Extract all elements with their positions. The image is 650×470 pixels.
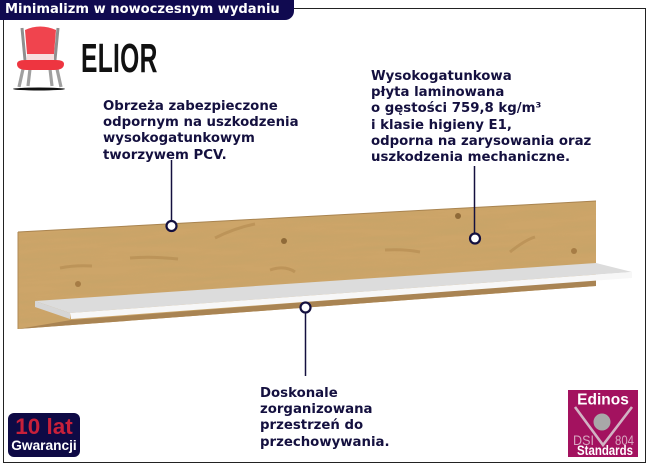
header banner: Minimalizm w nowoczesnym wydaniu (5, 2, 280, 17)
text: storage space: przechowywania. (260, 435, 390, 450)
text: laminated board: i klasie higieny E1, (371, 118, 512, 133)
callout: storage (300, 302, 310, 376)
callout: board (470, 166, 480, 244)
badge: Edinos standards: 804 (615, 432, 634, 448)
text: storage space (260, 386, 390, 450)
badge number: 10 lat (15, 414, 73, 439)
text: laminated board: płyta laminowana (371, 85, 504, 100)
badge: Edinos standards (568, 390, 638, 457)
icon: red chair (13, 26, 65, 90)
product name: ELIOR (81, 35, 158, 81)
text: storage space: przestrzeń do (260, 418, 363, 433)
text: laminated board: Wysokogatunkowa (371, 68, 512, 84)
badge: Edinos standards: Edinos (577, 392, 629, 408)
badge: 10 year warranty (8, 413, 80, 457)
shelf illustration (18, 160, 632, 376)
text: storage space: zorganizowana (260, 402, 373, 417)
text: laminated board: uszkodzenia mechaniczne. (371, 150, 570, 165)
callout: edge (166, 160, 176, 231)
text: edge protection: tworzywem PCV. (103, 148, 227, 163)
oak back panel (18, 200, 596, 329)
text: edge protection: Obrzeża zabezpieczone (103, 98, 278, 114)
text: edge protection (103, 98, 299, 163)
badge caption: Gwarancji (11, 438, 77, 453)
white shelf (35, 263, 632, 319)
text: edge protection: wysokogatunkowym (103, 131, 255, 146)
text: laminated board (371, 68, 591, 165)
text: laminated board: o gęstości 759,8 kg/m³ (371, 101, 541, 116)
text: edge protection: odpornym na uszkodzenia (103, 115, 299, 130)
badge: Edinos standards: DSI (573, 432, 594, 448)
text: laminated board: odporna na zarysowania oraz (371, 134, 591, 149)
text: storage space: Doskonale (260, 386, 338, 400)
